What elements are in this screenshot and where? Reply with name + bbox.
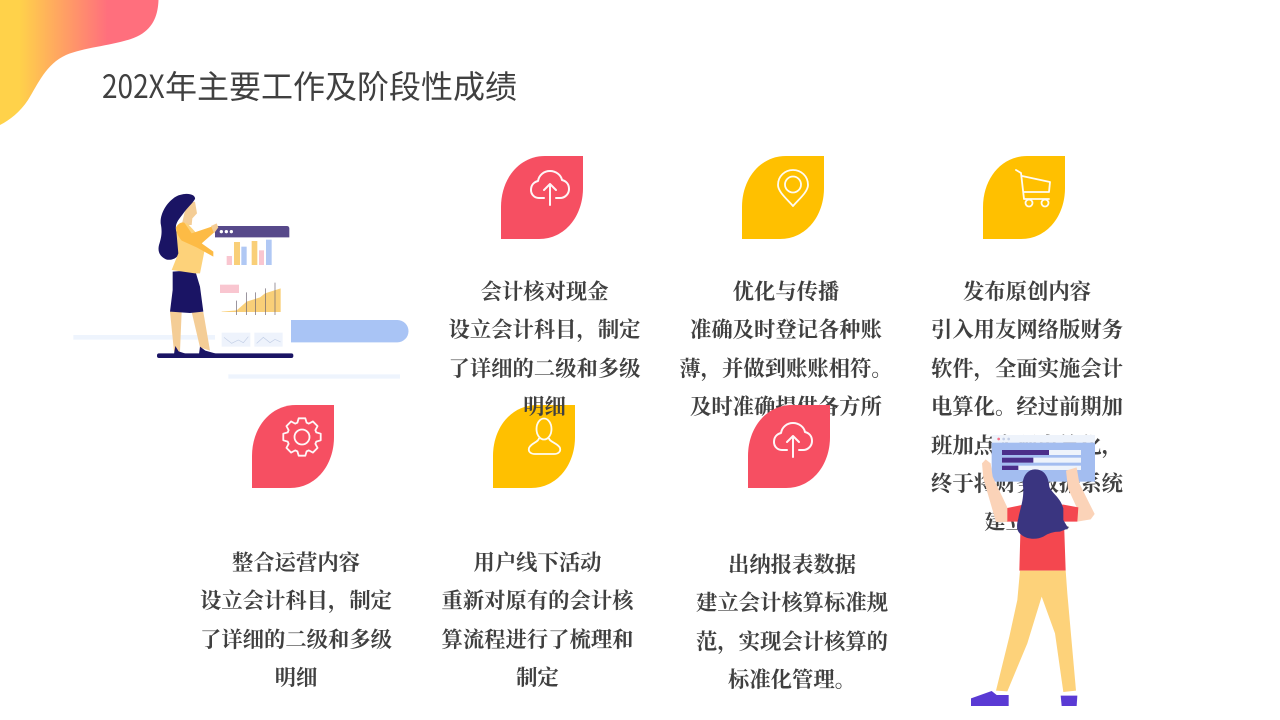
- text block: 发布原创内容: 发布原创内容: [963, 280, 1091, 304]
- text block: 整合运营内容: 设立会计科目，制定: [200, 589, 392, 613]
- text block: 出纳报表数据: 范，实现会计核算的: [696, 630, 888, 654]
- text block: 整合运营内容: 整合运营内容: [232, 551, 360, 575]
- text block: 优化与传播: 及时准确提供各方所: [690, 395, 882, 419]
- text block: 优化与传播: 准确及时登记各种账: [690, 318, 882, 342]
- text block: 会计核对现金: 了详细的二级和多级: [449, 357, 640, 381]
- illustration: woman presenting charts: [74, 194, 408, 378]
- text block: 会计核对现金: 明细: [523, 395, 566, 419]
- text block: 用户线下活动: 算流程进行了梳理和: [442, 628, 633, 652]
- text block: 用户线下活动: 重新对原有的会计核: [442, 589, 633, 613]
- text block: 会计核对现金: 设立会计科目，制定: [449, 318, 640, 342]
- icon: location pin: [742, 156, 824, 239]
- text block: 优化与传播: [679, 280, 893, 419]
- text block: 用户线下活动: 制定: [516, 666, 559, 690]
- text block: 整合运营内容: 了详细的二级和多级: [200, 628, 392, 652]
- text block: 整合运营内容: 明细: [275, 666, 317, 690]
- icon: person: [493, 405, 575, 488]
- text block: 用户线下活动: 用户线下活动: [474, 551, 601, 575]
- text block: 发布原创内容: 软件，全面实施会计: [931, 357, 1123, 381]
- text block: 出纳报表数据: 标准化管理。: [728, 668, 856, 692]
- text block: 发布原创内容: 电算化。经过前期加: [931, 395, 1123, 419]
- icon: cloud upload: [501, 156, 583, 239]
- text block: 用户线下活动: [442, 551, 633, 690]
- icon: cloud upload second: [748, 405, 830, 488]
- text block: 出纳报表数据: [696, 553, 888, 692]
- icon: shopping cart: [983, 156, 1065, 239]
- text block: 发布原创内容: 引入用友网络版财务: [931, 318, 1123, 342]
- illustration: woman holding screen: [971, 435, 1095, 706]
- text block: 发布原创内容: [931, 280, 1123, 534]
- text block: 会计核对现金: 会计核对现金: [480, 280, 608, 304]
- text block: 发布原创内容: 建立起来: [984, 510, 1070, 534]
- text block: 优化与传播: 优化与传播: [733, 280, 839, 304]
- text block: 整合运营内容: [200, 551, 392, 690]
- icon: gear: [252, 405, 334, 488]
- text block: 会计核对现金: [449, 280, 640, 419]
- text block: 出纳报表数据: 出纳报表数据: [728, 553, 856, 577]
- decorative corner blob: [0, 0, 158, 125]
- text block: 出纳报表数据: 建立会计核算标准规: [696, 591, 888, 615]
- title: 202X: [102, 62, 165, 108]
- text block: 发布原创内容: 班加点实现电算化，: [931, 434, 1123, 458]
- text block: 发布原创内容: 终于将财务数据系统: [931, 472, 1123, 496]
- title: 年主要工作及阶段性成绩: [165, 62, 517, 108]
- text block: 优化与传播: 薄，并做到账账相符。: [679, 357, 893, 381]
